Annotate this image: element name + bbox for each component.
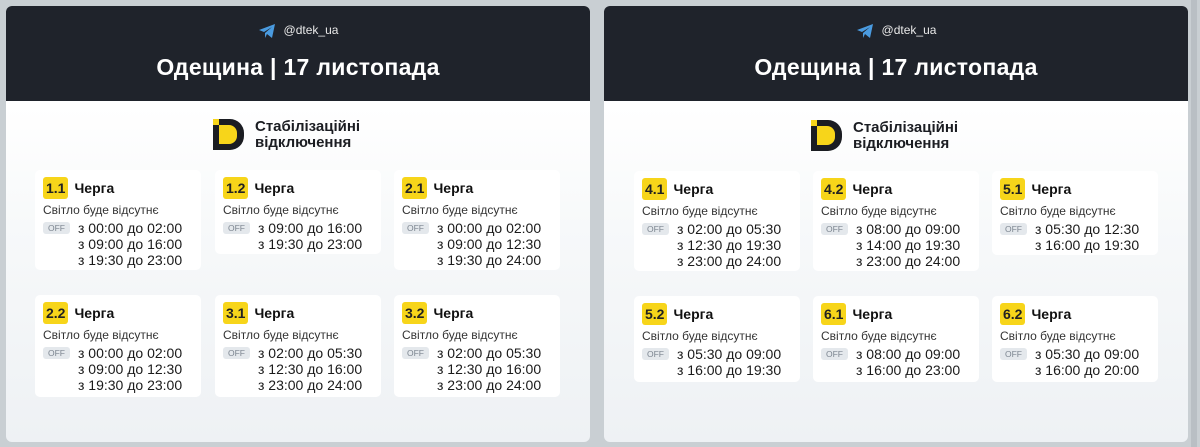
card 4.2: з 23:00 до 24:00 <box>856 253 960 269</box>
card 5.2: Світло буде відсутнє <box>642 329 758 343</box>
card 2.2: 2.2 <box>46 305 65 321</box>
card 6.2 <box>992 296 1158 382</box>
card 3.2: Черга <box>433 305 473 321</box>
card 2.1: з 00:00 до 02:00 <box>437 220 541 236</box>
logo <box>811 119 958 152</box>
card 6.2: з 16:00 до 20:00 <box>1035 362 1139 378</box>
card 3.1: Черга <box>254 305 294 321</box>
card 2.1: 2.1 <box>405 180 424 196</box>
card 1.2: Черга <box>254 180 294 196</box>
logo: Стабілізаційні <box>853 119 958 136</box>
card 5.2: OFF <box>647 349 664 359</box>
card 1.1: з 09:00 до 16:00 <box>78 236 182 252</box>
card 3.2: з 23:00 до 24:00 <box>437 377 541 393</box>
card 4.2: OFF <box>826 224 843 234</box>
card 2.2: Світло буде відсутнє <box>43 328 159 342</box>
card 6.2: Світло буде відсутнє <box>1000 329 1116 343</box>
card 3.1 <box>215 295 381 397</box>
card 6.2: 6.2 <box>1003 306 1022 322</box>
card 5.2: 5.2 <box>645 306 664 322</box>
card 5.2: з 05:30 до 09:00 <box>677 346 781 362</box>
card 6.1: OFF <box>826 349 843 359</box>
panel: right <box>604 6 1188 442</box>
card 2.2: OFF <box>48 348 65 358</box>
card 3.2 <box>394 295 560 397</box>
card 3.1: з 02:00 до 05:30 <box>258 345 362 361</box>
card 1.2: з 09:00 до 16:00 <box>258 220 362 236</box>
telegram handle <box>857 23 936 38</box>
card 5.1: з 16:00 до 19:30 <box>1035 237 1139 253</box>
card 2.1: OFF <box>407 223 424 233</box>
card 1.2: 1.2 <box>226 180 245 196</box>
card 2.1: з 09:00 до 12:30 <box>437 236 541 252</box>
card 4.1 <box>634 171 800 271</box>
card 6.1: 6.1 <box>824 306 843 322</box>
logo: відключення <box>853 135 949 152</box>
card 1.2: Світло буде відсутнє <box>223 203 339 217</box>
card 5.1: Черга <box>1031 181 1071 197</box>
card 1.2: з 19:30 до 23:00 <box>258 236 362 252</box>
card 6.1 <box>813 296 979 382</box>
card 3.2: Світло буде відсутнє <box>402 328 518 342</box>
card 3.1: з 12:30 до 16:00 <box>258 361 362 377</box>
card 4.2: з 08:00 до 09:00 <box>856 221 960 237</box>
card 6.1: з 16:00 до 23:00 <box>856 362 960 378</box>
card 6.2: з 05:30 до 09:00 <box>1035 346 1139 362</box>
telegram handle: @dtek_ua <box>882 23 936 37</box>
card 1.1 <box>35 170 201 270</box>
card 1.1: з 00:00 до 02:00 <box>78 220 182 236</box>
card 6.1: Світло буде відсутнє <box>821 329 937 343</box>
card 1.2: OFF <box>228 223 245 233</box>
card 6.1: з 08:00 до 09:00 <box>856 346 960 362</box>
card 5.1: OFF <box>1005 224 1022 234</box>
card 5.1: з 05:30 до 12:30 <box>1035 221 1139 237</box>
card 3.2: 3.2 <box>405 305 424 321</box>
card 6.1: Черга <box>852 306 892 322</box>
title: Одещина | 17 листопада <box>754 54 1038 80</box>
card 5.2 <box>634 296 800 382</box>
card 4.1: з 12:30 до 19:30 <box>677 237 781 253</box>
card 3.2: з 02:00 до 05:30 <box>437 345 541 361</box>
card 5.1 <box>992 171 1158 255</box>
logo: відключення <box>255 134 351 151</box>
card 2.2: з 19:30 до 23:00 <box>78 377 182 393</box>
card 2.2: Черга <box>74 305 114 321</box>
card 5.1: 5.1 <box>1003 181 1022 197</box>
card 4.2 <box>813 171 979 271</box>
card 1.1: OFF <box>48 223 65 233</box>
card 2.2: з 00:00 до 02:00 <box>78 345 182 361</box>
card 4.1: Світло буде відсутнє <box>642 204 758 218</box>
card 2.1: з 19:30 до 24:00 <box>437 252 541 268</box>
card 3.1: OFF <box>228 348 245 358</box>
telegram handle <box>259 23 338 38</box>
card 4.2: 4.2 <box>824 181 843 197</box>
card 2.1: Черга <box>433 180 473 196</box>
card 2.2 <box>35 295 201 397</box>
logo <box>213 118 360 151</box>
card 3.1: з 23:00 до 24:00 <box>258 377 362 393</box>
card 4.2: Світло буде відсутнє <box>821 204 937 218</box>
card 4.1: OFF <box>647 224 664 234</box>
card 1.1: 1.1 <box>46 180 65 196</box>
card 6.2: Черга <box>1031 306 1071 322</box>
card 4.1: Черга <box>673 181 713 197</box>
logo: Стабілізаційні <box>255 118 360 135</box>
card 1.1: з 19:30 до 23:00 <box>78 252 182 268</box>
card 3.1: 3.1 <box>226 305 245 321</box>
card 5.2: з 16:00 до 19:30 <box>677 362 781 378</box>
card 3.2: з 12:30 до 16:00 <box>437 361 541 377</box>
card 3.1: Світло буде відсутнє <box>223 328 339 342</box>
card 4.2: Черга <box>852 181 892 197</box>
card 3.2: OFF <box>407 348 424 358</box>
card 1.2 <box>215 170 381 254</box>
card 4.1: з 02:00 до 05:30 <box>677 221 781 237</box>
card 1.1: Світло буде відсутнє <box>43 203 159 217</box>
card 2.2: з 09:00 до 12:30 <box>78 361 182 377</box>
card 4.1: 4.1 <box>645 181 664 197</box>
card 5.1: Світло буде відсутнє <box>1000 204 1116 218</box>
card 2.1: Світло буде відсутнє <box>402 203 518 217</box>
header <box>604 6 1188 101</box>
header <box>6 6 590 101</box>
card 1.1: Черга <box>74 180 114 196</box>
card 5.2: Черга <box>673 306 713 322</box>
panel: left <box>6 6 590 442</box>
card 4.1: з 23:00 до 24:00 <box>677 253 781 269</box>
telegram handle: @dtek_ua <box>284 23 338 37</box>
scrollbar <box>1191 0 1197 447</box>
card 2.1 <box>394 170 560 270</box>
card 6.2: OFF <box>1005 349 1022 359</box>
title: Одещина | 17 листопада <box>156 54 440 80</box>
card 4.2: з 14:00 до 19:30 <box>856 237 960 253</box>
